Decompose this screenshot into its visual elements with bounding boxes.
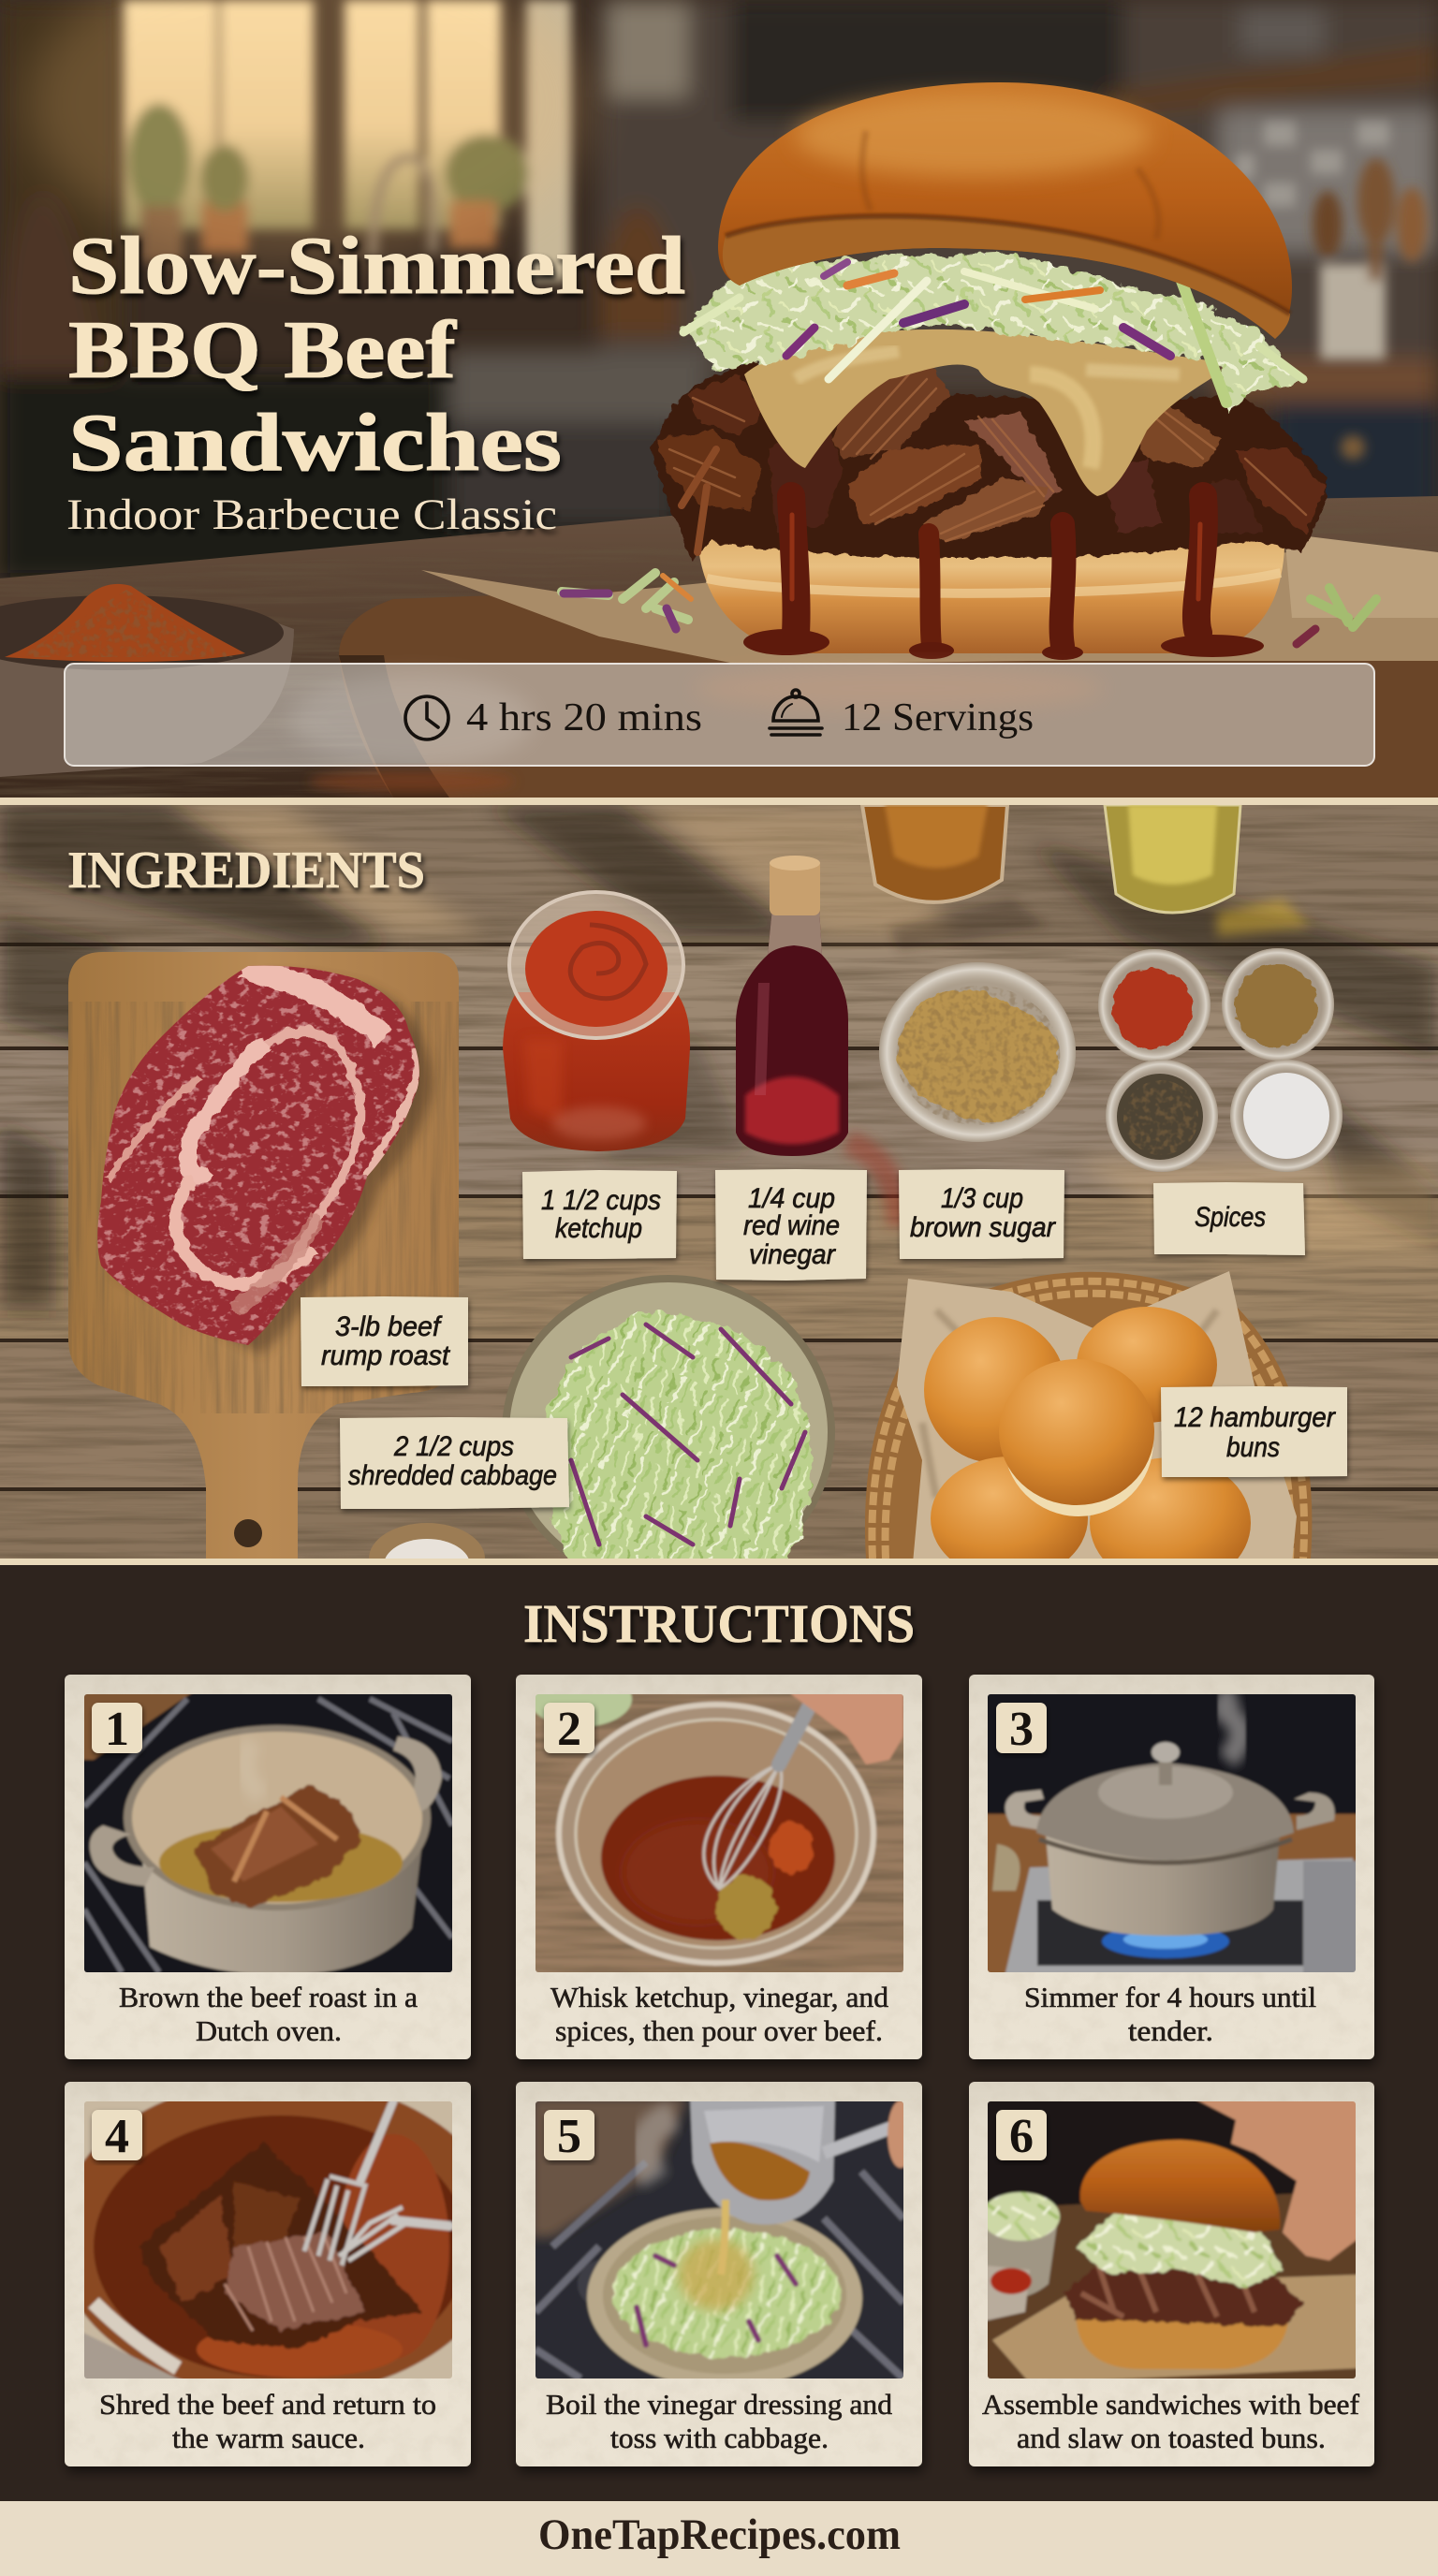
- label: beef rump roast: [301, 1296, 468, 1386]
- step 4 badge: 4: [105, 2110, 129, 2163]
- step 6 badge: [996, 2110, 1047, 2163]
- bottom bun: [699, 539, 1284, 653]
- title: Sandwiches: [68, 398, 562, 489]
- label: shredded cabbage: 2 1/2 cups: [393, 1431, 514, 1462]
- label: shredded cabbage: shredded cabbage: [348, 1460, 557, 1491]
- step 2 photo: [529, 1671, 908, 1977]
- prep time: 4 hrs 20 mins: [466, 696, 702, 739]
- label: shredded cabbage: [340, 1417, 569, 1509]
- panel: instructions: [0, 1565, 1438, 2501]
- hamburger buns: [924, 1307, 1251, 1588]
- step 5 text: toss with cabbage.: [610, 2422, 829, 2454]
- step 6 photo: [981, 2097, 1360, 2383]
- divider: [0, 798, 1438, 805]
- ingredients heading: INGREDIENTS: [67, 842, 425, 900]
- bowl: black pepper: [1106, 1060, 1218, 1172]
- panel: hero: [0, 0, 1438, 798]
- step 5 badge: [544, 2110, 594, 2163]
- step 6 badge: 6: [1009, 2110, 1034, 2163]
- coleslaw: [683, 253, 1303, 412]
- step 6 text: and slaw on toasted buns.: [1017, 2422, 1326, 2454]
- ingredient labels: [301, 1169, 1347, 1509]
- label: red wine vinegar: 1/4 cup: [748, 1183, 835, 1214]
- raw beef roast: [84, 955, 433, 1357]
- step 3 text: [1024, 1981, 1316, 2047]
- label: spices: Spices: [1195, 1202, 1266, 1233]
- red wine vinegar bottle: [736, 856, 899, 1226]
- cutting board: [47, 945, 665, 1563]
- step 4 text: Shred the beef and return to: [99, 2388, 436, 2421]
- servings: 12 Servings: [842, 696, 1034, 739]
- subtitle: Indoor Barbecue Classic: [66, 490, 557, 539]
- jar: honey amber: [862, 805, 1049, 950]
- bowl: cumin: [1222, 948, 1334, 1061]
- jar: oil: [1105, 805, 1311, 936]
- title: BBQ Beef: [68, 305, 458, 396]
- wood table: [0, 805, 1438, 1559]
- bowl of spice rub: [0, 584, 294, 777]
- step 3 photo: [983, 1690, 1360, 1977]
- bread basket: [865, 1271, 1312, 1588]
- cutting board and parchment: [339, 534, 1438, 798]
- label: hamburger buns: buns: [1226, 1432, 1280, 1463]
- step 2 card: [516, 1671, 922, 2059]
- label: beef rump roast: rump roast: [321, 1340, 451, 1371]
- label: hamburger buns: 12 hamburger: [1174, 1402, 1336, 1433]
- top bun: [718, 82, 1292, 339]
- panel: ingredients: [0, 805, 1438, 1594]
- step 5 text: [546, 2388, 893, 2454]
- small salt bowl: [369, 1523, 485, 1594]
- label: brown sugar: 1/3 cup: [941, 1183, 1023, 1214]
- step 2 text: [550, 1981, 889, 2047]
- step 1 card: [65, 1675, 471, 2059]
- step 3 text: Simmer for 4 hours until: [1024, 1981, 1316, 2013]
- step 3 text: tender.: [1128, 2014, 1213, 2047]
- label: ketchup: [522, 1170, 677, 1259]
- footer: [0, 2501, 1438, 2576]
- kitchen background: [0, 0, 1438, 576]
- bowl: salt: [1230, 1060, 1343, 1172]
- step 4 badge: [92, 2110, 142, 2163]
- icon: clock: [405, 696, 448, 739]
- melted cheese: [744, 329, 1217, 496]
- small spice bowls: [1098, 948, 1343, 1172]
- step 5 photo: [531, 2097, 914, 2388]
- step 6 text: [982, 2388, 1360, 2454]
- label: red wine vinegar: [715, 1169, 867, 1281]
- step 1 badge: [92, 1703, 142, 1756]
- sandwich: [652, 82, 1327, 660]
- website: OneTapRecipes.com: [538, 2510, 901, 2559]
- label: beef rump roast: 3-lb beef: [335, 1311, 443, 1342]
- label: spices: [1153, 1182, 1305, 1255]
- title: Slow-Simmered: [68, 221, 685, 312]
- sauce drips: [791, 496, 1204, 646]
- step 5 badge: 5: [557, 2110, 581, 2163]
- step 4 text: [99, 2388, 436, 2454]
- shredded cabbage bowl: [502, 1275, 835, 1589]
- pulled beef: [652, 360, 1327, 560]
- bowl: paprika: [1098, 949, 1211, 1061]
- icon: serving cloche: [770, 690, 822, 735]
- brown sugar bowl: [879, 962, 1076, 1142]
- label: ketchup: 1 1/2 cups: [541, 1185, 661, 1216]
- spice dust: [309, 770, 515, 793]
- glass stat bar: [65, 664, 1374, 768]
- step 1 text: [119, 1981, 418, 2047]
- step 2 badge: [544, 1703, 594, 1756]
- step 5 text: Boil the vinegar dressing and: [546, 2388, 893, 2421]
- table: [0, 496, 1438, 663]
- step 3 card: [969, 1675, 1374, 2059]
- label: ketchup: ketchup: [555, 1213, 642, 1244]
- label: red wine vinegar: red wine: [743, 1210, 840, 1241]
- step 4 card: [56, 2078, 506, 2466]
- step 1 text: Brown the beef roast in a: [119, 1981, 418, 2013]
- step 3 badge: [996, 1703, 1047, 1756]
- title: [68, 221, 685, 489]
- step 4 photo: [56, 2078, 506, 2396]
- ketchup jar: [503, 892, 749, 1161]
- divider: [0, 1559, 1438, 1565]
- label: hamburger buns: [1161, 1386, 1347, 1477]
- slaw scraps: [562, 573, 1376, 644]
- step 1 text: Dutch oven.: [196, 2014, 342, 2047]
- step 4 text: the warm sauce.: [172, 2422, 365, 2454]
- step 1 photo: [80, 1690, 457, 1977]
- step 6 card: [969, 2082, 1374, 2466]
- step 2 text: Whisk ketchup, vinegar, and: [550, 1981, 889, 2013]
- step 5 card: [516, 2082, 922, 2466]
- step 1 badge: 1: [105, 1703, 129, 1756]
- step 2 badge: 2: [557, 1703, 581, 1756]
- step 2 text: spices, then pour over beef.: [555, 2014, 883, 2047]
- label: red wine vinegar: vinegar: [749, 1239, 836, 1270]
- instructions heading: INSTRUCTIONS: [523, 1593, 915, 1654]
- step 3 badge: 3: [1009, 1703, 1034, 1756]
- step 6 text: Assemble sandwiches with beef: [982, 2388, 1360, 2421]
- label: brown sugar: [899, 1169, 1064, 1259]
- label: brown sugar: brown sugar: [910, 1212, 1056, 1243]
